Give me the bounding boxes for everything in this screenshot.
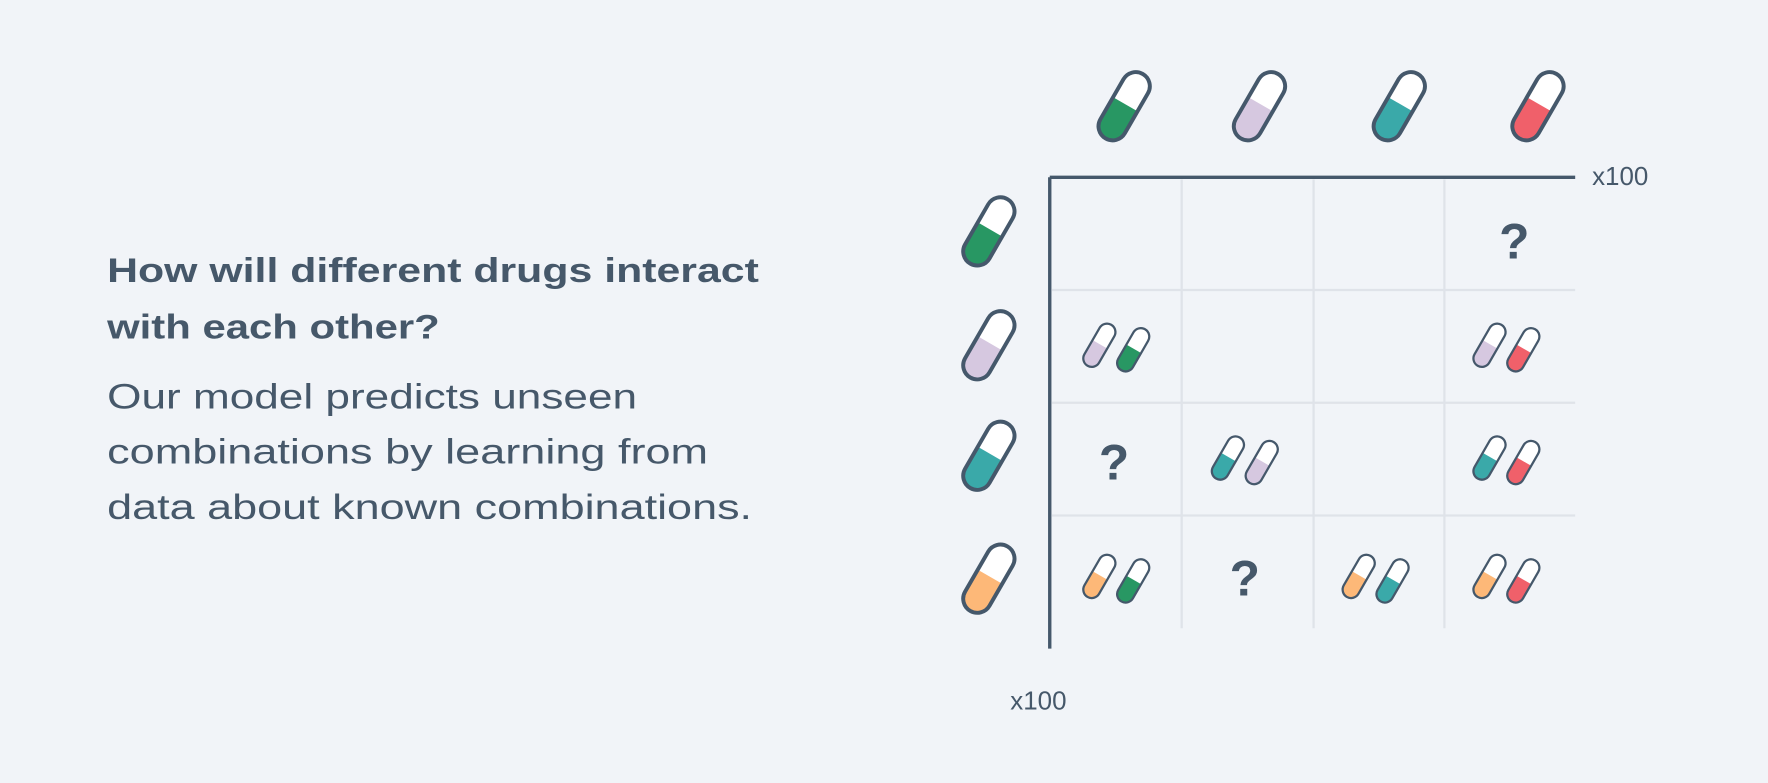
axis label top: x100 <box>1592 163 1648 191</box>
r1c0 <box>1082 322 1117 368</box>
heading: with each other? <box>106 309 440 347</box>
column header pills <box>1096 70 1566 142</box>
unknown cells: ? <box>1230 551 1260 607</box>
body text: combinations by learning from <box>107 433 708 472</box>
r2c3 <box>1472 435 1507 481</box>
r1c3 <box>1472 322 1507 368</box>
r2c1 <box>1210 435 1246 481</box>
body text: data about known combinations. <box>107 488 752 527</box>
axis label bottom: x100 <box>1010 687 1067 715</box>
axes <box>1050 177 1575 649</box>
heading: How will different drugs interact <box>107 252 759 290</box>
body text: Our model predicts unseen <box>107 377 637 416</box>
r3c0 <box>1082 554 1117 600</box>
body text <box>107 377 752 527</box>
unknown cells <box>1099 213 1529 607</box>
r3c2 <box>1342 554 1376 600</box>
heading <box>106 252 759 347</box>
unknown cells: ? <box>1499 213 1529 269</box>
row header pills <box>961 195 1016 615</box>
known combination cells <box>1078 320 1544 608</box>
r3c3 <box>1472 554 1507 600</box>
grid lines <box>1052 180 1575 628</box>
unknown cells: ? <box>1099 434 1129 490</box>
